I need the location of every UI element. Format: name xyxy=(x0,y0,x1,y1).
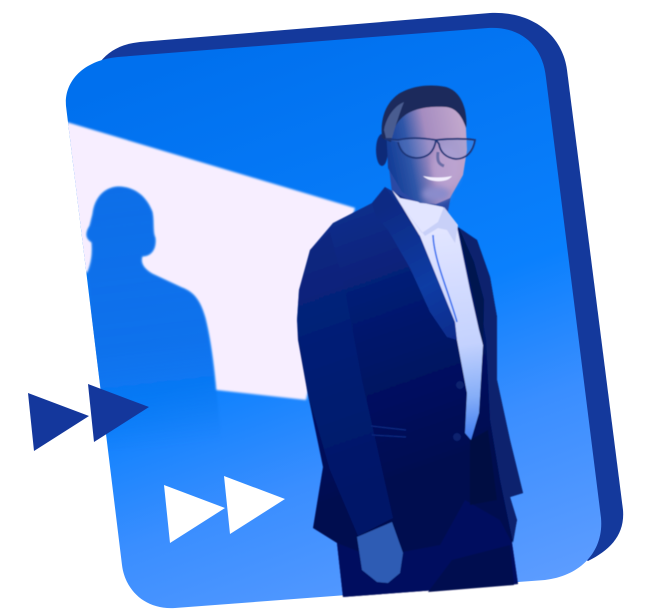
jacket buttons xyxy=(453,381,464,441)
right cheek highlight xyxy=(432,146,460,190)
trouser shadow xyxy=(428,545,514,592)
collar xyxy=(390,190,458,243)
glasses xyxy=(385,138,475,159)
jacket right panel xyxy=(458,227,523,543)
face xyxy=(386,104,467,204)
ear xyxy=(376,134,388,166)
man in suit xyxy=(297,85,523,597)
shirt placket line xyxy=(433,235,457,322)
nose shadow xyxy=(438,152,444,166)
chin tint xyxy=(422,187,450,201)
double arrow: white xyxy=(164,476,285,543)
left lapel xyxy=(372,187,457,340)
right lapel xyxy=(458,226,484,345)
hand xyxy=(357,522,403,583)
smile xyxy=(423,176,452,181)
shirt xyxy=(392,190,483,440)
trousers xyxy=(337,500,518,597)
sleeve xyxy=(297,232,393,536)
neck xyxy=(388,160,452,235)
jacket pocket xyxy=(371,426,406,437)
grey side hair xyxy=(384,102,404,138)
front panel: blue gradient card xyxy=(60,28,601,608)
suit silhouette xyxy=(297,187,523,597)
light patch with wall shadow silhouette xyxy=(60,120,355,450)
dark gap under shirt xyxy=(470,430,497,505)
hair xyxy=(382,85,466,142)
shadow tint xyxy=(87,187,222,450)
back panel: dark blue offset card xyxy=(100,13,623,561)
double arrow: dark blue xyxy=(28,384,149,451)
